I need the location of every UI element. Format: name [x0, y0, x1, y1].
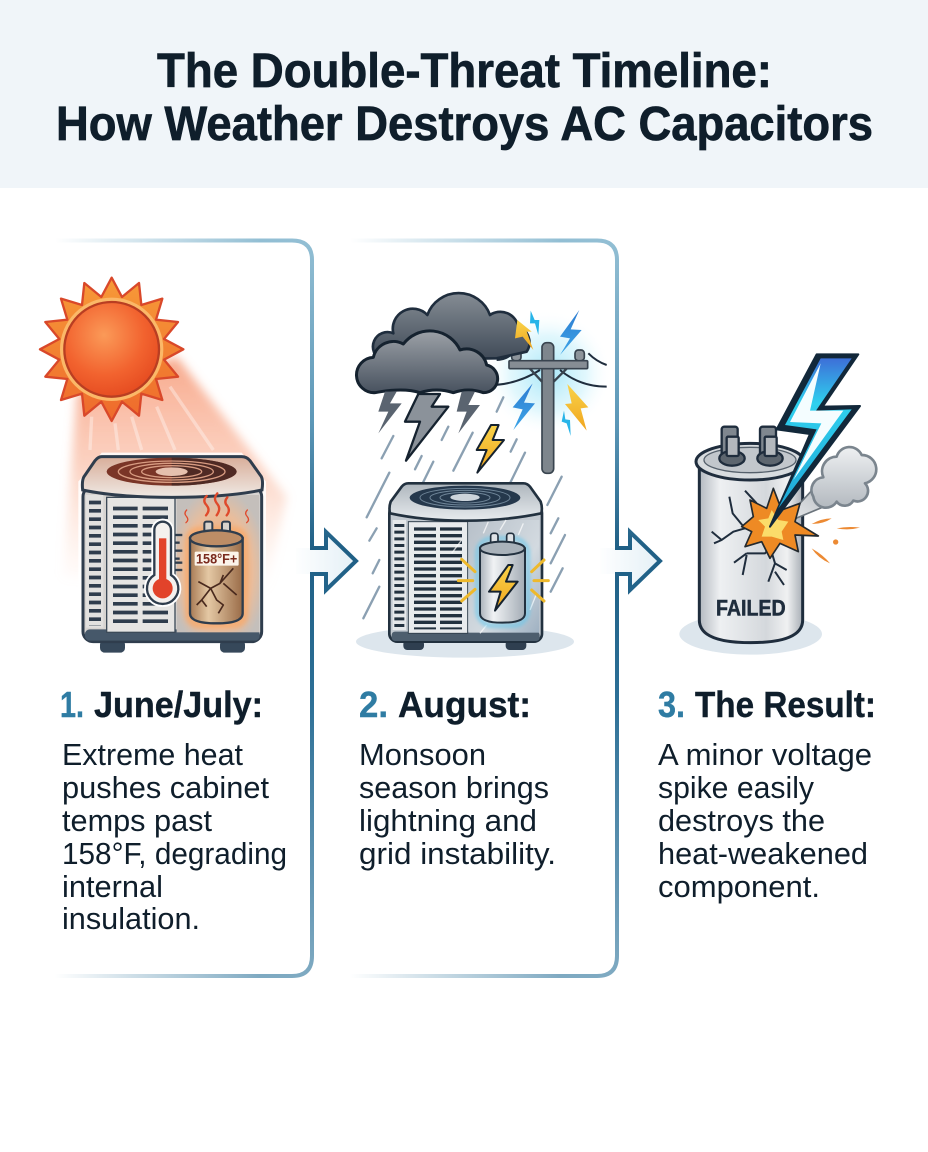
electric glow	[485, 310, 612, 437]
ground shadow	[356, 626, 574, 658]
step 2 heading: August:	[398, 684, 531, 725]
illustration: storm, power pole and AC unit	[356, 293, 612, 658]
left louver	[86, 495, 103, 628]
terminals	[719, 427, 783, 466]
step 2 body	[359, 737, 556, 871]
smoke puff	[811, 447, 876, 508]
fan	[107, 458, 237, 486]
illustration: sun heating AC unit	[40, 278, 287, 653]
step 3 heading: 3.	[658, 684, 685, 725]
ground shadow	[679, 613, 822, 655]
cracks	[197, 568, 237, 613]
panel frame and arrow: step 1 to step 2	[55, 240, 356, 976]
step 1 body	[62, 737, 287, 936]
step 3 body	[658, 737, 872, 904]
back cloud	[373, 293, 529, 360]
power pole	[483, 343, 607, 473]
front cloud	[356, 331, 498, 393]
hot panel	[177, 495, 259, 632]
yellow sparks	[458, 559, 548, 601]
glowing capacitor	[477, 533, 528, 626]
AC unit	[78, 453, 266, 653]
sparks	[812, 518, 860, 563]
illustration: failed capacitor	[679, 354, 876, 655]
step 3 body: A minor voltage	[658, 737, 872, 772]
step 3 body: heat-weakened	[658, 836, 868, 871]
step 2 body: lightning and	[359, 803, 537, 838]
step 2 heading: 2.	[359, 684, 388, 725]
failed label: FAILED	[716, 595, 786, 620]
step 1 body: pushes cabinet	[62, 770, 269, 805]
rain on cabinet	[452, 520, 537, 633]
overheated capacitor	[185, 522, 248, 628]
front grille	[107, 497, 175, 632]
sun	[40, 278, 183, 421]
light streaks	[90, 387, 213, 450]
step 1 heading: 1.	[60, 684, 84, 725]
step 1 text	[60, 684, 287, 936]
rain	[363, 397, 565, 618]
feet	[100, 640, 125, 653]
title	[56, 45, 873, 151]
explosion	[742, 488, 818, 558]
heat waves	[185, 493, 249, 523]
step 1 heading: June/July:	[94, 684, 263, 725]
electric bolts	[513, 310, 588, 436]
panel frame and arrow: step 2 to step 3	[350, 240, 660, 976]
step 2 body: season brings	[359, 770, 549, 805]
cabinet	[83, 487, 262, 642]
step 3 body: component.	[658, 869, 820, 904]
cracks	[712, 491, 787, 585]
smoke jet	[780, 483, 840, 525]
sunlight beam	[63, 357, 287, 593]
step 3 heading: The Result:	[695, 684, 876, 725]
overheated capacitor: 158°F+	[196, 550, 237, 566]
header band	[0, 0, 928, 188]
step 1 body: 158°F, degrading	[62, 836, 287, 871]
step 2 body: grid instability.	[359, 836, 556, 871]
step 1 body: internal	[62, 869, 163, 904]
step 1 body: Extreme heat	[62, 737, 243, 772]
storm bolts	[378, 392, 504, 473]
lightning bolt	[770, 354, 860, 527]
step 1 body: temps past	[62, 803, 212, 838]
step 3 body: spike easily	[658, 770, 814, 805]
title: The Double-Threat Timeline:	[157, 45, 772, 98]
yellow bolt on cloud	[515, 320, 533, 350]
step 2 text	[359, 684, 556, 871]
step 2 body: Monsoon	[359, 737, 486, 772]
title: How Weather Destroys AC Capacitors	[56, 98, 873, 151]
AC unit	[389, 483, 542, 650]
lid	[82, 457, 263, 497]
thermometer	[147, 522, 182, 604]
step 3 body: destroys the	[658, 803, 825, 838]
capacitor	[696, 427, 804, 643]
step 1 body: insulation.	[62, 901, 200, 936]
step 3 text	[658, 684, 876, 904]
